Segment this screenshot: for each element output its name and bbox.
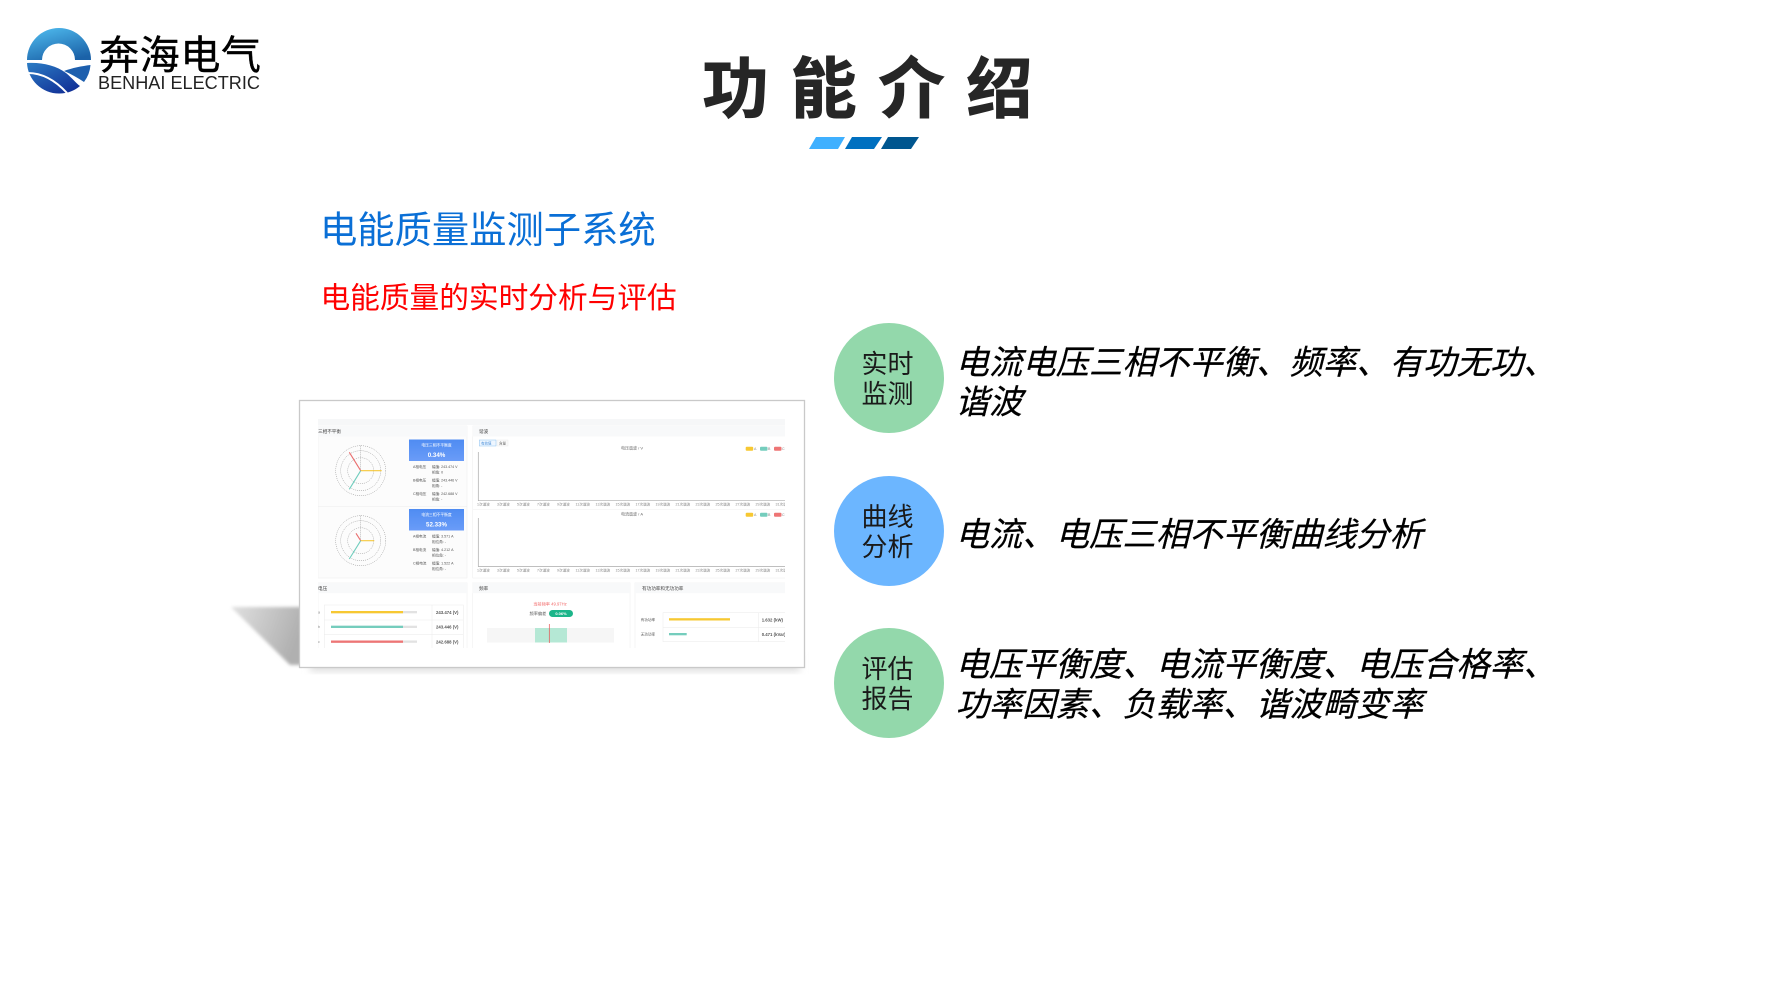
circle badge: real-time monitoring: 实时 <box>861 349 914 379</box>
chart: voltage harmonics: 29次谐波 <box>756 502 771 506</box>
current phase readings: 相位角: - <box>432 539 447 544</box>
chart: voltage harmonics: 9次谐波 <box>557 502 570 506</box>
chart: current harmonics: 1次谐波 <box>477 568 490 572</box>
chart: current harmonics: 27次谐波 <box>736 568 751 572</box>
chart: voltage harmonics: 31次谐波 <box>776 502 791 506</box>
current phase readings: A相电流 <box>413 534 427 538</box>
panel: voltage bars: 243.474 (V) <box>436 610 459 615</box>
panel: voltage bars <box>318 583 467 653</box>
current phase readings: 相位角: - <box>432 552 447 558</box>
subheading: real-time analysis: 电能质量的实时分析与评估 <box>320 282 677 315</box>
voltage phase readings: 相角: 0 <box>432 470 443 474</box>
current phase readings: C相电流 <box>413 560 427 566</box>
current phase readings: B相电流 <box>413 547 427 552</box>
chart: current harmonics: 7次谐波 <box>537 568 550 572</box>
chart: current harmonics: 11次谐波 <box>576 568 590 572</box>
voltage phase readings: 幅值: 242.688 V <box>432 491 458 496</box>
chart: voltage harmonics: 5次谐波 <box>517 502 530 506</box>
title: 功能介绍 <box>702 52 1054 126</box>
panel: active and reactive power: 有功功率和无功功率 <box>642 585 684 592</box>
icon: logo globe and waves <box>27 28 91 94</box>
chart: current harmonics: 21次谐波 <box>676 568 691 572</box>
circle badge: curve analysis <box>834 476 944 586</box>
chart: voltage harmonics: 25次谐波 <box>716 502 731 506</box>
current phase readings: 幅值: 4.212 A <box>432 547 454 552</box>
chart: voltage harmonics: 27次谐波 <box>736 502 751 506</box>
current phase readings <box>413 534 454 571</box>
description: evaluation report: 功率因素、负载率、谐波畸变率 <box>956 687 1428 724</box>
item 1: real-time monitoring <box>834 323 1557 433</box>
card: voltage imbalance: 电压三相不平衡度 <box>421 442 452 448</box>
panel: voltage bars: a <box>318 610 320 614</box>
current phase readings: 幅值: 3.571 A <box>432 534 454 538</box>
chart: voltage harmonics: C <box>782 447 785 451</box>
chart: current harmonics: 9次谐波 <box>557 568 570 572</box>
voltage phase readings <box>413 464 458 502</box>
panel: voltage bars: c <box>318 640 320 644</box>
circle badge: real-time monitoring: 监测 <box>861 379 914 409</box>
current phase readings: 幅值: 1.522 A <box>432 560 454 566</box>
circle badge: evaluation report: 评估 <box>861 654 914 684</box>
heading: subsystem name: 电能质量监测子系统 <box>320 209 656 251</box>
card: current imbalance: 52.33% <box>426 522 447 528</box>
panel: harmonics: 谐波 <box>479 428 489 435</box>
chart: current harmonics <box>477 510 791 572</box>
chart: current harmonics: B <box>768 513 771 517</box>
chart: current harmonics: 3次谐波 <box>497 568 510 572</box>
item 3: evaluation report <box>834 628 1557 738</box>
chart: current harmonics: A <box>754 513 757 517</box>
description: real-time monitoring: 谐波 <box>956 384 1027 422</box>
circle badge: real-time monitoring <box>834 323 944 433</box>
panel: harmonics <box>473 426 791 578</box>
chart: voltage harmonics: 1次谐波 <box>477 502 490 506</box>
tabs: 含量 <box>499 440 506 445</box>
panel: active and reactive power <box>634 582 785 648</box>
tabs: 有效值 <box>481 440 492 445</box>
voltage phase readings: A相电压 <box>413 464 427 469</box>
item 2: curve analysis <box>834 476 1427 586</box>
title underline bars <box>809 137 919 149</box>
logo: Benhai Electric <box>27 28 261 94</box>
chart: voltage harmonics: 15次谐波 <box>616 502 631 506</box>
card: voltage imbalance: 0.34% <box>428 452 446 459</box>
panel: frequency: 频率 <box>479 585 489 592</box>
description: curve analysis: 电流、电压三相不平衡曲线分析 <box>956 517 1427 554</box>
voltage phase readings: 相角: - <box>432 483 443 488</box>
chart: voltage harmonics: A <box>754 447 757 451</box>
panel: frequency: 0.06% <box>555 611 567 616</box>
current phase readings: 相位角: - <box>432 566 447 571</box>
card: current imbalance: 电流三相不平衡度 <box>421 512 452 517</box>
voltage phase readings: 幅值: 243.474 V <box>432 464 458 469</box>
panel: frequency <box>473 583 630 653</box>
voltage phase readings: C相电压 <box>413 491 427 496</box>
chart: voltage harmonics: 19次谐波 <box>656 502 671 506</box>
panel: voltage bars: 电压 <box>318 585 328 592</box>
panel: three-phase imbalance <box>318 426 467 578</box>
chart: current harmonics: 17次谐波 <box>636 568 651 572</box>
chart: current harmonics: 13次谐波 <box>596 568 611 572</box>
card: current imbalance <box>409 509 464 530</box>
card: voltage imbalance <box>409 440 464 461</box>
chart: current harmonics: 5次谐波 <box>517 568 530 572</box>
panel: active and reactive power: 1.632 (kW) <box>762 618 784 622</box>
panel: dashboard screenshot <box>300 400 804 668</box>
chart: voltage harmonics: 7次谐波 <box>537 502 550 506</box>
circle badge: evaluation report <box>834 628 944 738</box>
voltage phase readings: 相角: - <box>432 496 443 502</box>
chart: voltage harmonics: 21次谐波 <box>676 502 691 506</box>
panel: voltage bars: b <box>318 625 320 629</box>
tabs <box>479 440 508 446</box>
chart: voltage harmonics <box>477 444 791 506</box>
panel: frequency: 频率偏差 <box>530 610 546 617</box>
panel: voltage bars: 243.446 (V) <box>436 625 459 630</box>
screenshot shadow <box>231 607 800 671</box>
description: real-time monitoring: 电流电压三相不平衡、频率、有功无功、 <box>956 345 1557 382</box>
chart: current harmonics: 25次谐波 <box>716 568 731 572</box>
panel: three-phase imbalance: 三相不平衡 <box>318 428 341 435</box>
logo Chinese name: 奔海电气 <box>99 34 261 78</box>
chart: voltage harmonics: 13次谐波 <box>596 502 611 506</box>
chart: current harmonics: 23次谐波 <box>696 568 711 572</box>
chart: voltage harmonics: B <box>768 447 771 451</box>
circle badge: evaluation report: 报告 <box>861 684 914 714</box>
chart: voltage harmonics: 电压谐波 / V <box>621 444 643 450</box>
chart: voltage harmonics: 3次谐波 <box>497 502 510 506</box>
panel: active and reactive power: 无功功率 <box>641 632 655 636</box>
panel: voltage bars: 242.688 (V) <box>436 640 459 644</box>
chart: current harmonics: 15次谐波 <box>616 568 631 572</box>
chart: current phasor polar <box>336 515 386 566</box>
description: evaluation report: 电压平衡度、电流平衡度、电压合格率、 <box>956 647 1557 684</box>
chart: current harmonics: 19次谐波 <box>656 568 671 572</box>
chart: voltage harmonics: 17次谐波 <box>636 502 651 506</box>
chart: voltage harmonics: 23次谐波 <box>696 502 711 506</box>
logo English name: BENHAI ELECTRIC <box>98 73 260 93</box>
chart: current harmonics: 电流谐波 / A <box>621 510 643 516</box>
panel: frequency: 当前频率 49.97Hz <box>533 600 567 608</box>
panel: active and reactive power: 0.471 (kVar) <box>762 632 786 637</box>
chart: voltage phasor polar <box>336 445 386 496</box>
circle badge: curve analysis: 分析 <box>861 532 914 562</box>
voltage phase readings: B相电压 <box>413 478 427 482</box>
chart: voltage harmonics: 11次谐波 <box>576 502 590 506</box>
chart: current harmonics: 31次谐波 <box>776 568 791 572</box>
chart: current harmonics: C <box>782 513 785 517</box>
panel: active and reactive power: 有功功率 <box>641 617 655 622</box>
circle badge: curve analysis: 曲线 <box>861 502 914 532</box>
voltage phase readings: 幅值: 243.446 V <box>432 478 458 482</box>
chart: current harmonics: 29次谐波 <box>756 568 771 572</box>
